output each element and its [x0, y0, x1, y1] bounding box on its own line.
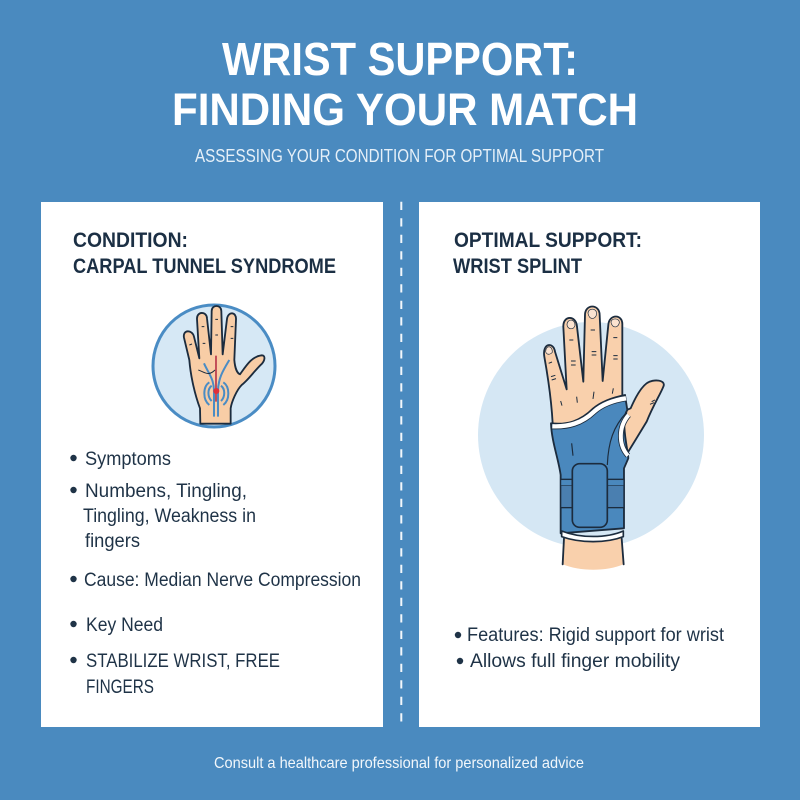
splint body — [551, 395, 628, 533]
condition bullet list: STABILIZE WRIST, FREE — [86, 651, 280, 672]
condition bullet list: fingers — [85, 531, 140, 552]
icon: hand wearing wrist splint — [478, 306, 704, 570]
condition bullet list: Symptoms — [85, 449, 171, 470]
condition bullet list: Numbens, Tingling, — [85, 481, 247, 502]
panel: optimal support — [419, 202, 760, 727]
condition bullet list: Cause: Median Nerve Compression — [84, 570, 361, 591]
forearm — [563, 538, 624, 570]
footer note: Consult a healthcare professional for personalized advice — [214, 755, 584, 772]
strap — [561, 479, 624, 508]
support heading — [453, 229, 642, 278]
support heading: OPTIMAL SUPPORT: — [454, 229, 642, 252]
icon: hand with compressed median nerve — [153, 305, 275, 427]
title — [172, 33, 638, 135]
support bullet list — [455, 625, 725, 672]
panel: condition — [41, 202, 383, 727]
condition bullet list — [70, 449, 361, 698]
pad — [572, 464, 607, 527]
support heading: WRIST SPLINT — [453, 255, 582, 278]
fingers — [544, 306, 627, 428]
fingernails — [546, 309, 619, 354]
title: FINDING YOUR MATCH — [172, 84, 638, 135]
bottom cuff — [562, 531, 623, 542]
support bullet list: Allows full finger mobility — [470, 651, 680, 672]
support bullet list: Features: Rigid support for wrist — [467, 625, 725, 646]
thumb — [622, 380, 664, 452]
title: WRIST SUPPORT: — [222, 33, 578, 85]
condition bullet list: Key Need — [86, 615, 163, 636]
condition heading: CONDITION: — [73, 229, 188, 252]
condition heading — [73, 229, 336, 278]
condition bullet list: FINGERS — [86, 677, 154, 698]
condition bullet list: Tingling, Weakness in — [83, 506, 256, 527]
subtitle: ASSESSING YOUR CONDITION FOR OPTIMAL SUPPORT — [195, 146, 604, 166]
condition heading: CARPAL TUNNEL SYNDROME — [73, 255, 336, 278]
